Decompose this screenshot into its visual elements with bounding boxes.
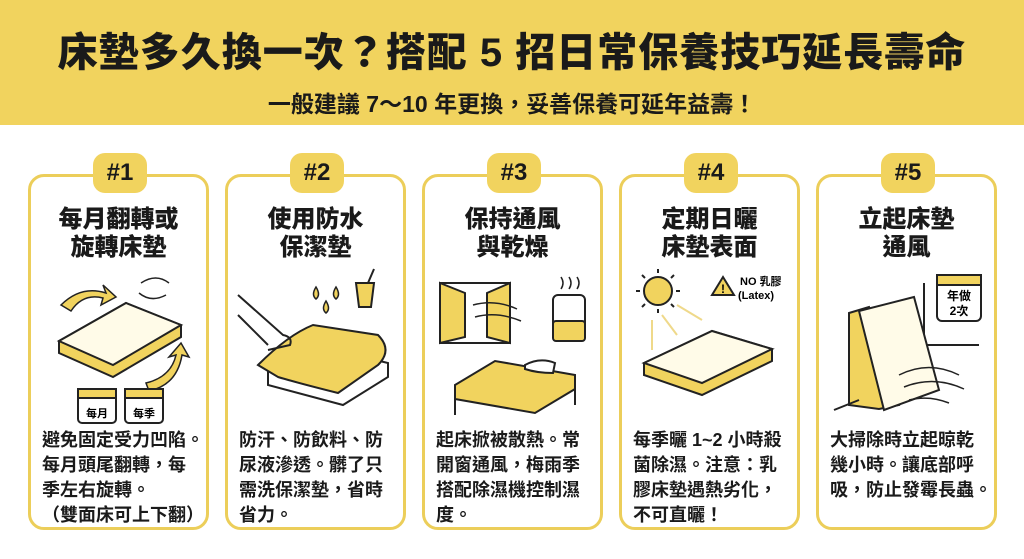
card title 2: 使用防水 [268,206,364,233]
panel: card 3 [422,174,603,530]
body text 4: 膠床墊遇熱劣化， [633,480,777,500]
body text 3 [436,430,580,525]
badge 4 [684,153,738,193]
body text 4: 每季曬 1~2 小時殺 [633,430,782,450]
badge 1: #1 [107,159,133,186]
body text 2: 需洗保潔墊，省時 [239,480,383,500]
icon: sun and mattress: (Latex) [738,290,774,302]
card title 4 [662,206,758,261]
badge 4: #4 [698,159,724,186]
icon: window bed dehumidifier [439,276,586,415]
card title 4: 定期日曬 [662,206,758,233]
panel: card 1 [28,174,209,530]
icon: sun and mattress [636,269,782,396]
body text 2: 尿液滲透。髒了只 [239,455,383,475]
body text 5: 幾小時。讓底部呼 [830,455,974,475]
card title 3 [464,206,560,261]
card title 5 [858,206,954,261]
body text 3: 開窗通風，梅雨季 [436,455,580,475]
panel: card 4 [619,174,800,530]
body text 5 [830,430,992,500]
badge 1 [93,153,147,193]
title: 床墊多久換一次？搭配 5 招日常保養技巧延長壽命 [58,31,966,75]
icon: mattress rotate: 每季 [133,406,155,420]
icon: waterproof pad [237,268,389,406]
body text 1: （雙面床可上下翻） [42,505,204,525]
subtitle: 一般建議 7～10 年更換，妥善保養可延年益壽！ [268,91,756,117]
body text 3: 起床掀被散熱。常 [436,430,580,450]
body text 1 [42,430,204,525]
body text 1: 避免固定受力凹陷。 [42,430,204,450]
body text 5: 吸，防止發霉長蟲。 [830,480,992,500]
body text 3: 度。 [436,505,472,525]
panel: card 5 [816,174,997,530]
body text 2 [239,430,383,525]
badge 2 [290,153,344,193]
body text 1: 每月頭尾翻轉，每 [42,455,186,475]
banner [0,0,1024,125]
card title 4: 床墊表面 [662,234,758,261]
icon: standing mattress: 2次 [950,303,968,318]
panel: card 2 [225,174,406,530]
card title 5: 立起床墊 [858,206,954,233]
card title 3: 保持通風 [464,206,560,233]
badge 3: #3 [501,159,527,186]
badge 2: #2 [304,159,330,186]
card title 2 [268,206,364,261]
card title 1: 旋轉床墊 [70,234,166,261]
body text 4: 菌除濕。注意：乳 [633,455,777,475]
icon: standing mattress: 年做 [947,288,971,303]
body text 2: 防汗、防飲料、防 [239,430,383,450]
body text 4 [633,430,782,525]
card title 2: 保潔墊 [280,234,352,261]
icon: mattress rotate: 每月 [86,406,108,420]
body text 5: 大掃除時立起晾乾 [830,430,974,450]
badge 5 [881,153,935,193]
icon: mattress rotate [56,277,190,424]
icon: standing mattress [834,274,982,412]
card title 1: 每月翻轉或 [58,206,178,233]
body text 3: 搭配除濕機控制濕 [436,480,580,500]
body text 1: 季左右旋轉。 [42,480,150,500]
body text 2: 省力。 [239,505,293,525]
badge 3 [487,153,541,193]
card title 1 [58,206,178,261]
badge 5: #5 [895,159,921,186]
card title 5: 通風 [882,234,930,261]
icon: sun and mattress: ! [721,282,725,296]
icon: sun and mattress: NO 乳膠 [740,274,782,288]
body text 4: 不可直曬！ [633,505,723,525]
card title 3: 與乾燥 [476,234,548,261]
